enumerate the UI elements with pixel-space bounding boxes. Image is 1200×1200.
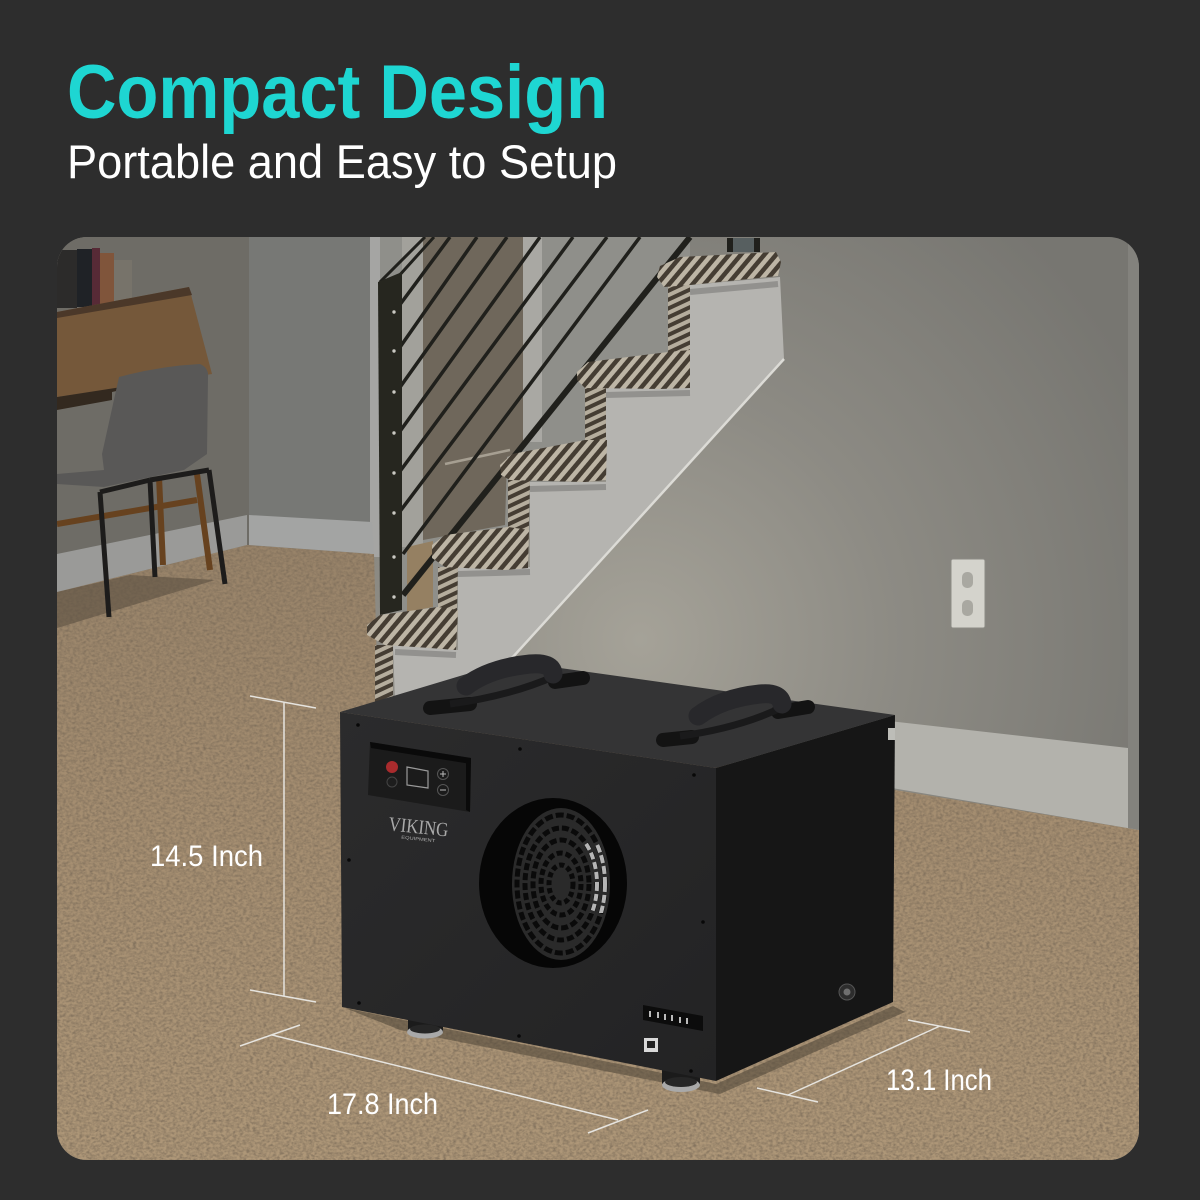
- dimension: width: [240, 1025, 648, 1133]
- subtitle: Portable and Easy to Setup: [67, 135, 617, 188]
- alcove wall: [249, 237, 370, 522]
- carpet floor: [57, 545, 1139, 1160]
- dimension: depth: 13.1 Inch: [886, 1064, 992, 1097]
- dimension: height: [150, 696, 316, 1002]
- control panel: [368, 742, 471, 812]
- feet: [407, 1016, 700, 1092]
- panel: basement room scene: [57, 237, 1139, 1160]
- dimension: depth: [757, 1020, 992, 1102]
- brand logo: EQUIPMENT: [401, 835, 436, 843]
- wall outlet: [951, 559, 985, 628]
- product: dehumidifier: [340, 661, 905, 1094]
- rear bracket: [888, 728, 895, 740]
- alcove door frame: [370, 237, 380, 557]
- top face: [340, 661, 895, 768]
- chair: [57, 364, 225, 617]
- staircase wall and door: [380, 237, 690, 640]
- brand logo: [390, 817, 448, 842]
- room wall: [57, 237, 1139, 1160]
- dimension: height: 14.5 Inch: [150, 840, 263, 873]
- baseboards: [57, 237, 1139, 830]
- carpeted stairs: [367, 252, 781, 704]
- drain fitting: [839, 984, 855, 1000]
- network port: [644, 1038, 658, 1052]
- right side face: [716, 715, 895, 1081]
- handle right: [663, 694, 808, 740]
- stair railing: [380, 237, 758, 595]
- floor shadow under chair: [57, 575, 215, 628]
- books: [57, 248, 132, 308]
- brand logo: VIKING: [387, 813, 449, 841]
- fan intake: [479, 798, 627, 968]
- front face: [340, 712, 716, 1081]
- dimension: width: 17.8 Inch: [327, 1088, 438, 1121]
- white stair stringer: [393, 277, 784, 702]
- title: Compact Design: [67, 50, 608, 135]
- desk: [57, 287, 212, 410]
- terminal block: [643, 1005, 703, 1031]
- screws: [347, 723, 705, 1073]
- contact shadow: [345, 1006, 905, 1094]
- handle left: [430, 664, 583, 708]
- left wall: [57, 237, 249, 554]
- railing post: [378, 272, 402, 615]
